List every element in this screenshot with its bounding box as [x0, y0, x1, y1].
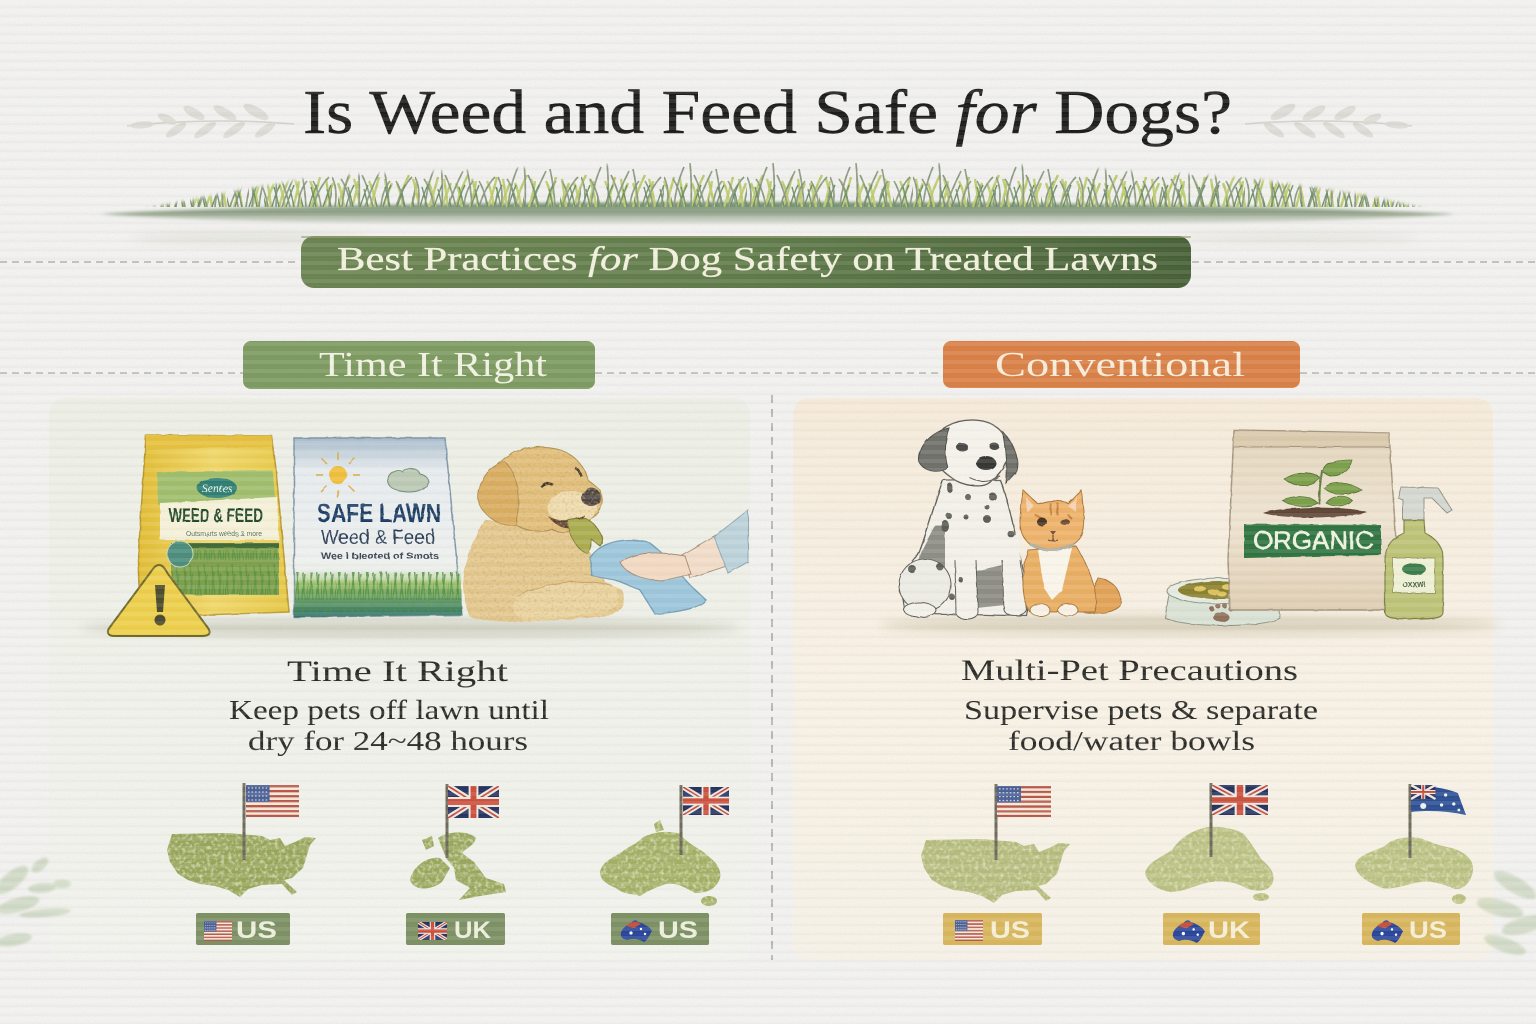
- illustration: dalmatian: [899, 420, 1030, 619]
- heading: Conventional: Conventional: [995, 345, 1245, 384]
- label chip: UK with Australian flag: UK: [1208, 917, 1251, 944]
- decorative sprig: left of title: [127, 101, 294, 141]
- illustration: towel and hand: [590, 510, 748, 614]
- label chip: UK with Australian flag: [1163, 913, 1260, 945]
- heading: Time It Right: [243, 341, 595, 389]
- illustration: blue safe lawn bag: Wee I bleoted of Smots: [321, 551, 439, 561]
- illustration: orange cat: [1020, 490, 1121, 616]
- illustration: organic fertilizer bag: [1228, 430, 1398, 610]
- subtitle banner: Best Practices for Dog Safety on Treated Lawns: [337, 241, 1158, 278]
- divider: header dashes: [0, 261, 1536, 263]
- illustration: yellow weed and feed bag: [138, 435, 289, 616]
- illustration: spray bottle: OXXWI: [1402, 582, 1426, 589]
- illustration: yellow weed and feed bag: Outsmarts weeds & more: [186, 531, 262, 538]
- illustration: golden retriever being wiped: [463, 447, 624, 622]
- corner foliage: bottom right: [1475, 866, 1536, 959]
- divider: column dashes: [0, 372, 1536, 374]
- map: United Kingdom with UK flag: [410, 784, 506, 900]
- text: Time It Right advice: Time It Right: [287, 655, 509, 688]
- icon: warning triangle: [108, 565, 210, 636]
- ground shadow: [80, 619, 740, 637]
- cloud: [388, 468, 429, 492]
- map: Australia with UK flag: [1145, 783, 1274, 901]
- illustration: yellow weed and feed bag: WEED & FEED: [169, 506, 263, 527]
- panel: Time It Right: [49, 398, 750, 960]
- map: Australia with UK flag: [600, 785, 729, 906]
- ground shadow: [880, 616, 1500, 634]
- illustration: blue safe lawn bag: SAFE LAWN: [317, 498, 441, 528]
- map: United States with US flag: [167, 783, 316, 897]
- label chip: US: [943, 913, 1042, 945]
- label chip: US with Australian flag: US: [658, 917, 698, 944]
- map: Australia with Australian flag: [1355, 784, 1473, 904]
- illustration: yellow weed and feed bag: Sentes: [202, 481, 233, 495]
- text: Time It Right advice: [229, 655, 549, 756]
- title: Is Weed and Feed Safe for Dogs?: [303, 79, 1232, 147]
- text: Multi-Pet Precautions advice: [961, 654, 1318, 756]
- label chip: US with Australian flag: [611, 913, 709, 945]
- label chip: US: US: [236, 917, 277, 944]
- divider: vertical dashes between panels: [771, 395, 773, 960]
- illustration: pet food bowl: [1165, 578, 1280, 626]
- decorative sprig: right of title: [1245, 101, 1412, 141]
- label chip: US: [196, 913, 290, 945]
- illustration: organic fertilizer bag: ORGANIC: [1253, 527, 1374, 555]
- text: Time It Right advice: dry for 24~48 hours: [248, 726, 528, 756]
- label chip: UK: UK: [454, 917, 492, 944]
- corner foliage: bottom left: [0, 855, 71, 949]
- text: Time It Right advice: Keep pets off lawn until: [229, 695, 549, 725]
- text: Multi-Pet Precautions advice: Multi-Pet Precautions: [961, 654, 1298, 687]
- subtitle banner: [301, 236, 1191, 288]
- illustration: blue safe lawn bag: [294, 438, 462, 617]
- text: Multi-Pet Precautions advice: Supervise pets & separate: [964, 695, 1318, 725]
- heading: Conventional: [943, 341, 1300, 388]
- sun: [316, 452, 360, 498]
- illustration: spray bottle: [1385, 487, 1452, 619]
- label chip: US with Australian flag: US: [1409, 917, 1447, 944]
- map: United States with US flag: [921, 784, 1070, 903]
- label chip: UK: [406, 913, 505, 945]
- label chip: US with Australian flag: [1362, 913, 1460, 945]
- label chip: US: US: [990, 917, 1030, 944]
- text: Multi-Pet Precautions advice: food/water bowls: [1008, 726, 1255, 756]
- paw print: [1210, 604, 1234, 622]
- grass strip: [103, 162, 1452, 244]
- heading: Time It Right: Time It Right: [319, 345, 547, 384]
- illustration: blue safe lawn bag: Weed & Feed: [321, 527, 435, 549]
- panel: Conventional: [793, 398, 1500, 960]
